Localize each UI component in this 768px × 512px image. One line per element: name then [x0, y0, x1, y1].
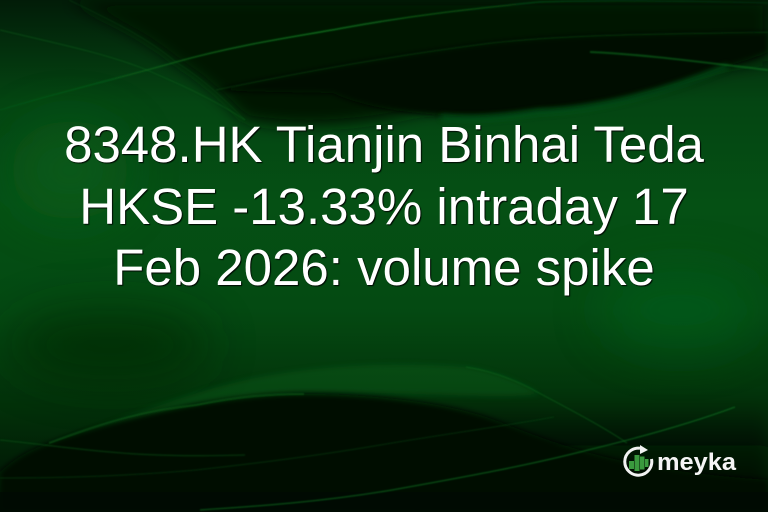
lower right darkening	[420, 380, 768, 512]
dark hump	[0, 394, 768, 512]
wordmark: meyka	[657, 449, 737, 476]
icon: circular arrow with bars	[625, 445, 652, 475]
bottom green band	[60, 365, 540, 442]
top dark area	[69, 0, 768, 125]
title: 8348.HK Tianjin Binhai Teda	[64, 116, 704, 173]
title: HKSE -13.33% intraday 17	[79, 178, 689, 234]
title	[64, 116, 706, 297]
top lines	[0, 1, 768, 110]
logo: meyka	[623, 445, 737, 477]
bright band under the eye	[441, 66, 728, 118]
soft shading blobs	[600, 270, 760, 350]
bottom lines	[200, 407, 735, 510]
title: Feb 2026: volume spike	[113, 239, 655, 296]
